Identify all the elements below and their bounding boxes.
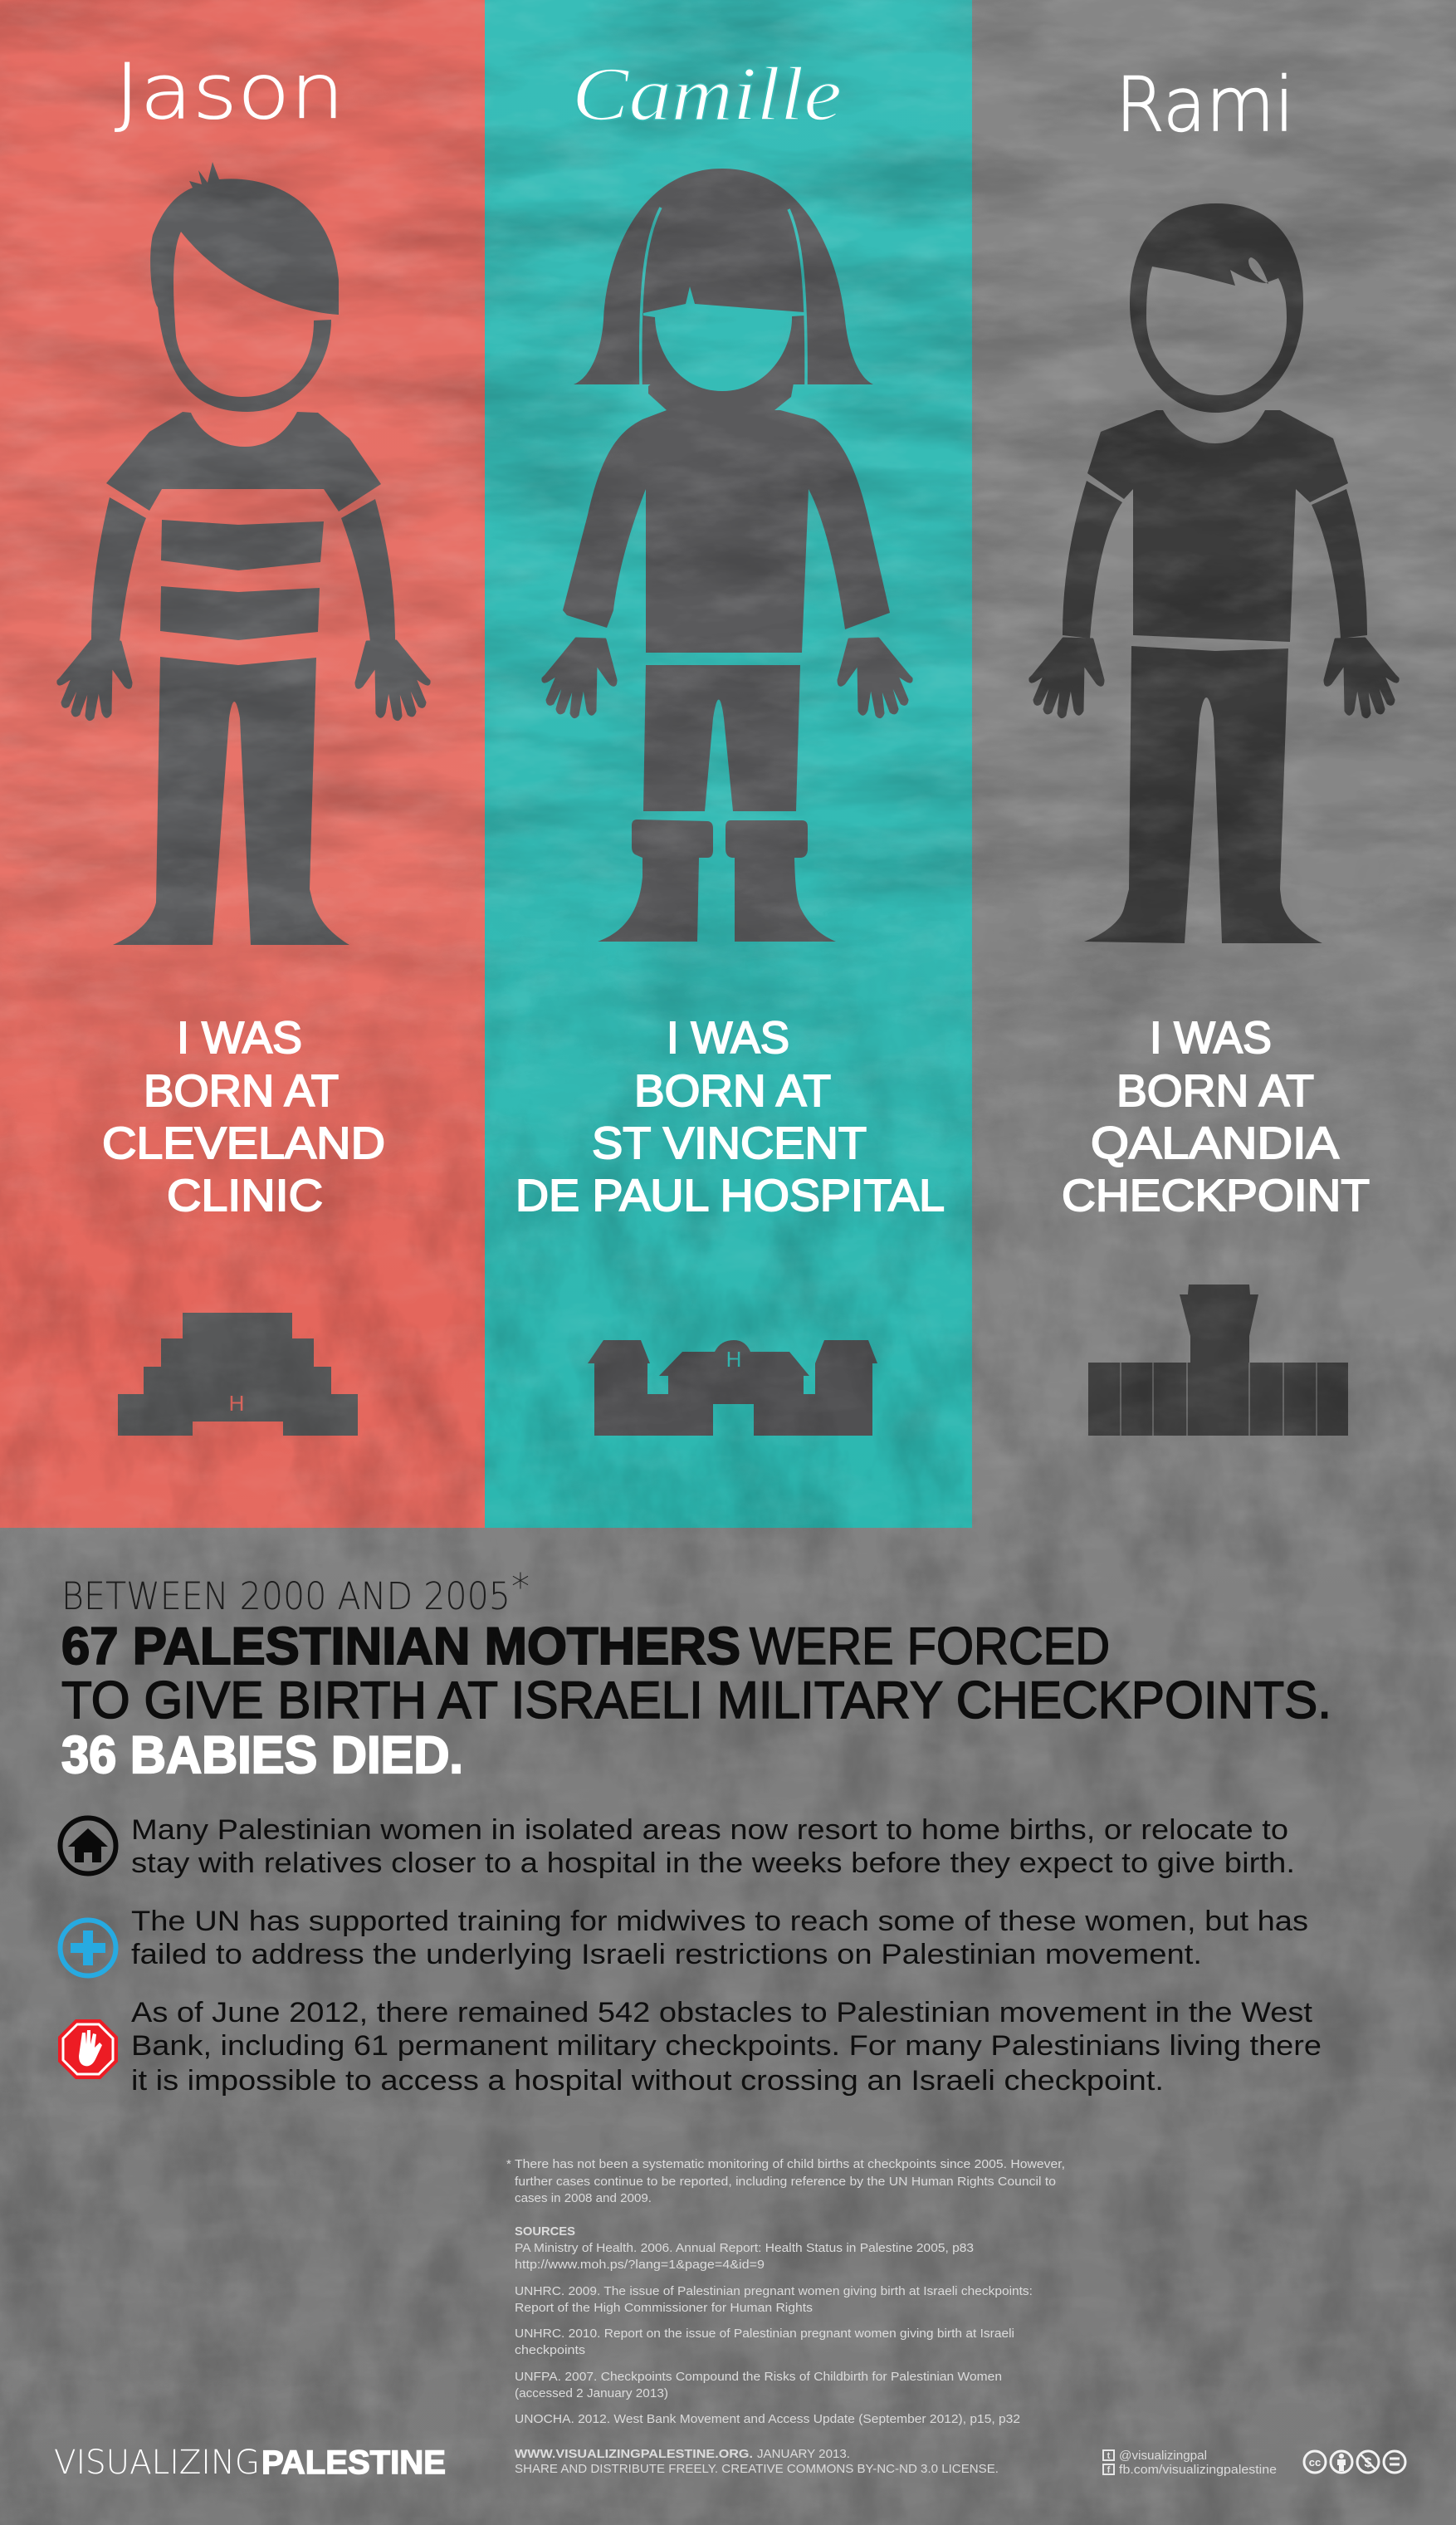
text: obstacles: it is impossible to access a hospital without crossing an Israeli checkpoint. [131, 2065, 1164, 2097]
logo: Visualizing Palestine: PALESTINE [261, 2444, 446, 2481]
name: Jason: Jason [115, 47, 344, 136]
label: Jason birthplace: CLEVELAND [102, 1118, 385, 1168]
website and licence: SHARE AND DISTRIBUTE FREELY. CREATIVE COMMONS BY-NC-ND 3.0 LICENSE. [515, 2462, 999, 2476]
footnote [506, 2157, 1065, 2205]
Camille sweater [563, 410, 890, 653]
text: UN midwives [131, 1906, 1308, 1970]
icons: creative commons: $ [1365, 2456, 1372, 2470]
social links: f [1107, 2465, 1111, 2475]
sources list: checkpoints [515, 2343, 585, 2357]
label: Jason birthplace: BORN AT [144, 1066, 339, 1116]
Jason hair and head outline [150, 162, 339, 412]
icon: Cleveland Clinic building [118, 1313, 358, 1436]
Jason arms [91, 497, 395, 642]
label: Rami birthplace [1062, 1013, 1370, 1221]
footnote: cases in 2008 and 2009. [515, 2191, 652, 2205]
headline: babies died: 36 BABIES DIED. [61, 1726, 463, 1784]
Jason hands [58, 641, 429, 720]
label: Jason birthplace [102, 1013, 385, 1221]
headline: mothers forced: 67 PALESTINIAN MOTHERS [61, 1617, 740, 1676]
Rami trousers [1084, 646, 1322, 943]
label: Camille birthplace: DE PAUL HOSPITAL [515, 1171, 945, 1221]
label: Camille birthplace: BORN AT [634, 1066, 831, 1116]
figure: Camille [543, 169, 911, 942]
panel: Camille column background [485, 0, 972, 1528]
headline: mothers forced: TO GIVE BIRTH AT ISRAELI MILITARY CHECKPOINTS. [61, 1671, 1331, 1730]
icon: Cleveland Clinic building: H [229, 1391, 244, 1416]
sources list: http://www.moh.ps/?lang=1&page=4&id=9 [515, 2258, 765, 2272]
social links [1103, 2449, 1277, 2477]
figure: Jason [58, 162, 429, 945]
label: Jason birthplace: I WAS [177, 1013, 302, 1063]
Rami face [1146, 257, 1287, 395]
social links: @visualizingpal [1119, 2449, 1207, 2463]
heading: between 2000 and 2005: BETWEEN 2000 AND 2005 [61, 1574, 511, 1618]
website and licence: JANUARY 2013. [757, 2447, 850, 2461]
website and licence: WWW.VISUALIZINGPALESTINE.ORG. [515, 2447, 753, 2461]
icon: Qalandia checkpoint tower and wall [1088, 1285, 1348, 1436]
text: home births [131, 1814, 1295, 1879]
text: UN midwives: failed to address the underlying Israeli restrictions on Palestinian movement. [131, 1939, 1202, 1970]
label: Camille birthplace: I WAS [667, 1013, 789, 1063]
footnote: * [506, 2157, 511, 2171]
text: obstacles: Bank, including 61 permanent military checkpoints. For many Palestinians living there [131, 2030, 1322, 2062]
Camille hair [574, 169, 873, 384]
headline: mothers forced [61, 1617, 1331, 1730]
panel: Jason column background [0, 0, 485, 1528]
text: obstacles: As of June 2012, there remained 542 obstacles to Palestinian movement in the West [131, 1997, 1313, 2028]
icon: St Vincent hospital building: H [726, 1347, 741, 1372]
label: Rami birthplace: BORN AT [1116, 1066, 1314, 1116]
label: Rami birthplace: I WAS [1150, 1013, 1272, 1063]
logo: Visualizing Palestine: VISUALIZING [54, 2444, 260, 2482]
label: Rami birthplace: QALANDIA [1091, 1118, 1339, 1168]
name: Rami: Rami [1116, 61, 1294, 149]
website and licence [515, 2447, 999, 2476]
footnote: further cases continue to be reported, including reference by the UN Human Rights Council to [515, 2175, 1056, 2189]
Camille face [643, 286, 804, 391]
heading: between 2000 and 2005: * [511, 1566, 530, 1608]
sources list: UNHRC. 2010. Report on the issue of Palestinian pregnant women giving birth at Israeli [515, 2327, 1014, 2341]
sources list: Report of the High Commissioner for Human Rights [515, 2301, 813, 2315]
sources list: UNFPA. 2007. Checkpoints Compound the Risks of Childbirth for Palestinian Women [515, 2370, 1002, 2384]
footnote: There has not been a systematic monitoring of child births at checkpoints since 2005. However, [515, 2157, 1065, 2171]
name: Camille: Camille [572, 51, 842, 136]
Camille hands [543, 639, 911, 717]
label: Jason birthplace: CLINIC [167, 1171, 323, 1221]
text: obstacles [131, 1997, 1322, 2097]
icons: creative commons [1304, 2451, 1405, 2473]
sources list: UNOCHA. 2012. West Bank Movement and Access Update (September 2012), p15, p32 [515, 2412, 1020, 2426]
icon: home [60, 1818, 116, 1873]
Rami shirt [1087, 410, 1348, 642]
icon: St Vincent hospital building [588, 1340, 877, 1436]
text: home births: stay with relatives closer to a hospital in the weeks before they expect to give birth. [131, 1847, 1295, 1879]
Jason shirt top [106, 412, 381, 511]
label: Rami birthplace: CHECKPOINT [1062, 1171, 1370, 1221]
icon: stop hand [58, 2019, 118, 2079]
Camille neck and collar [648, 379, 794, 410]
text: home births: Many Palestinian women in isolated areas now resort to home births, or relocate to [131, 1814, 1288, 1846]
sources list: SOURCES [515, 2224, 575, 2239]
sources list [515, 2224, 1033, 2426]
sources list: (accessed 2 January 2013) [515, 2386, 668, 2400]
sources list: PA Ministry of Health. 2006. Annual Report: Health Status in Palestine 2005, p83 [515, 2241, 974, 2255]
Rami head [1130, 203, 1303, 413]
headline: mothers forced: WERE FORCED [750, 1617, 1110, 1676]
logo: Visualizing Palestine [54, 2444, 446, 2482]
Camille trousers [643, 665, 800, 811]
Camille hair slivers [641, 208, 806, 384]
Rami hands [1030, 639, 1398, 717]
social links: fb.com/visualizingpalestine [1119, 2463, 1277, 2477]
Jason trousers [113, 657, 349, 945]
social links: t [1107, 2451, 1111, 2461]
sources list: UNHRC. 2009. The issue of Palestinian pregnant women giving birth at Israeli checkpoints: [515, 2284, 1033, 2298]
icons: creative commons: cc [1309, 2456, 1321, 2469]
label: Camille birthplace: ST VINCENT [592, 1118, 867, 1168]
label: Camille birthplace [515, 1013, 945, 1221]
Camille boots [598, 820, 836, 942]
Jason shirt stripes [160, 520, 324, 640]
icon: medical plus [60, 1920, 116, 1976]
text: UN midwives: The UN has supported training for midwives to reach some of these women, but has [131, 1906, 1308, 1937]
Rami arms [1063, 481, 1367, 639]
figure: Rami [1030, 203, 1398, 943]
